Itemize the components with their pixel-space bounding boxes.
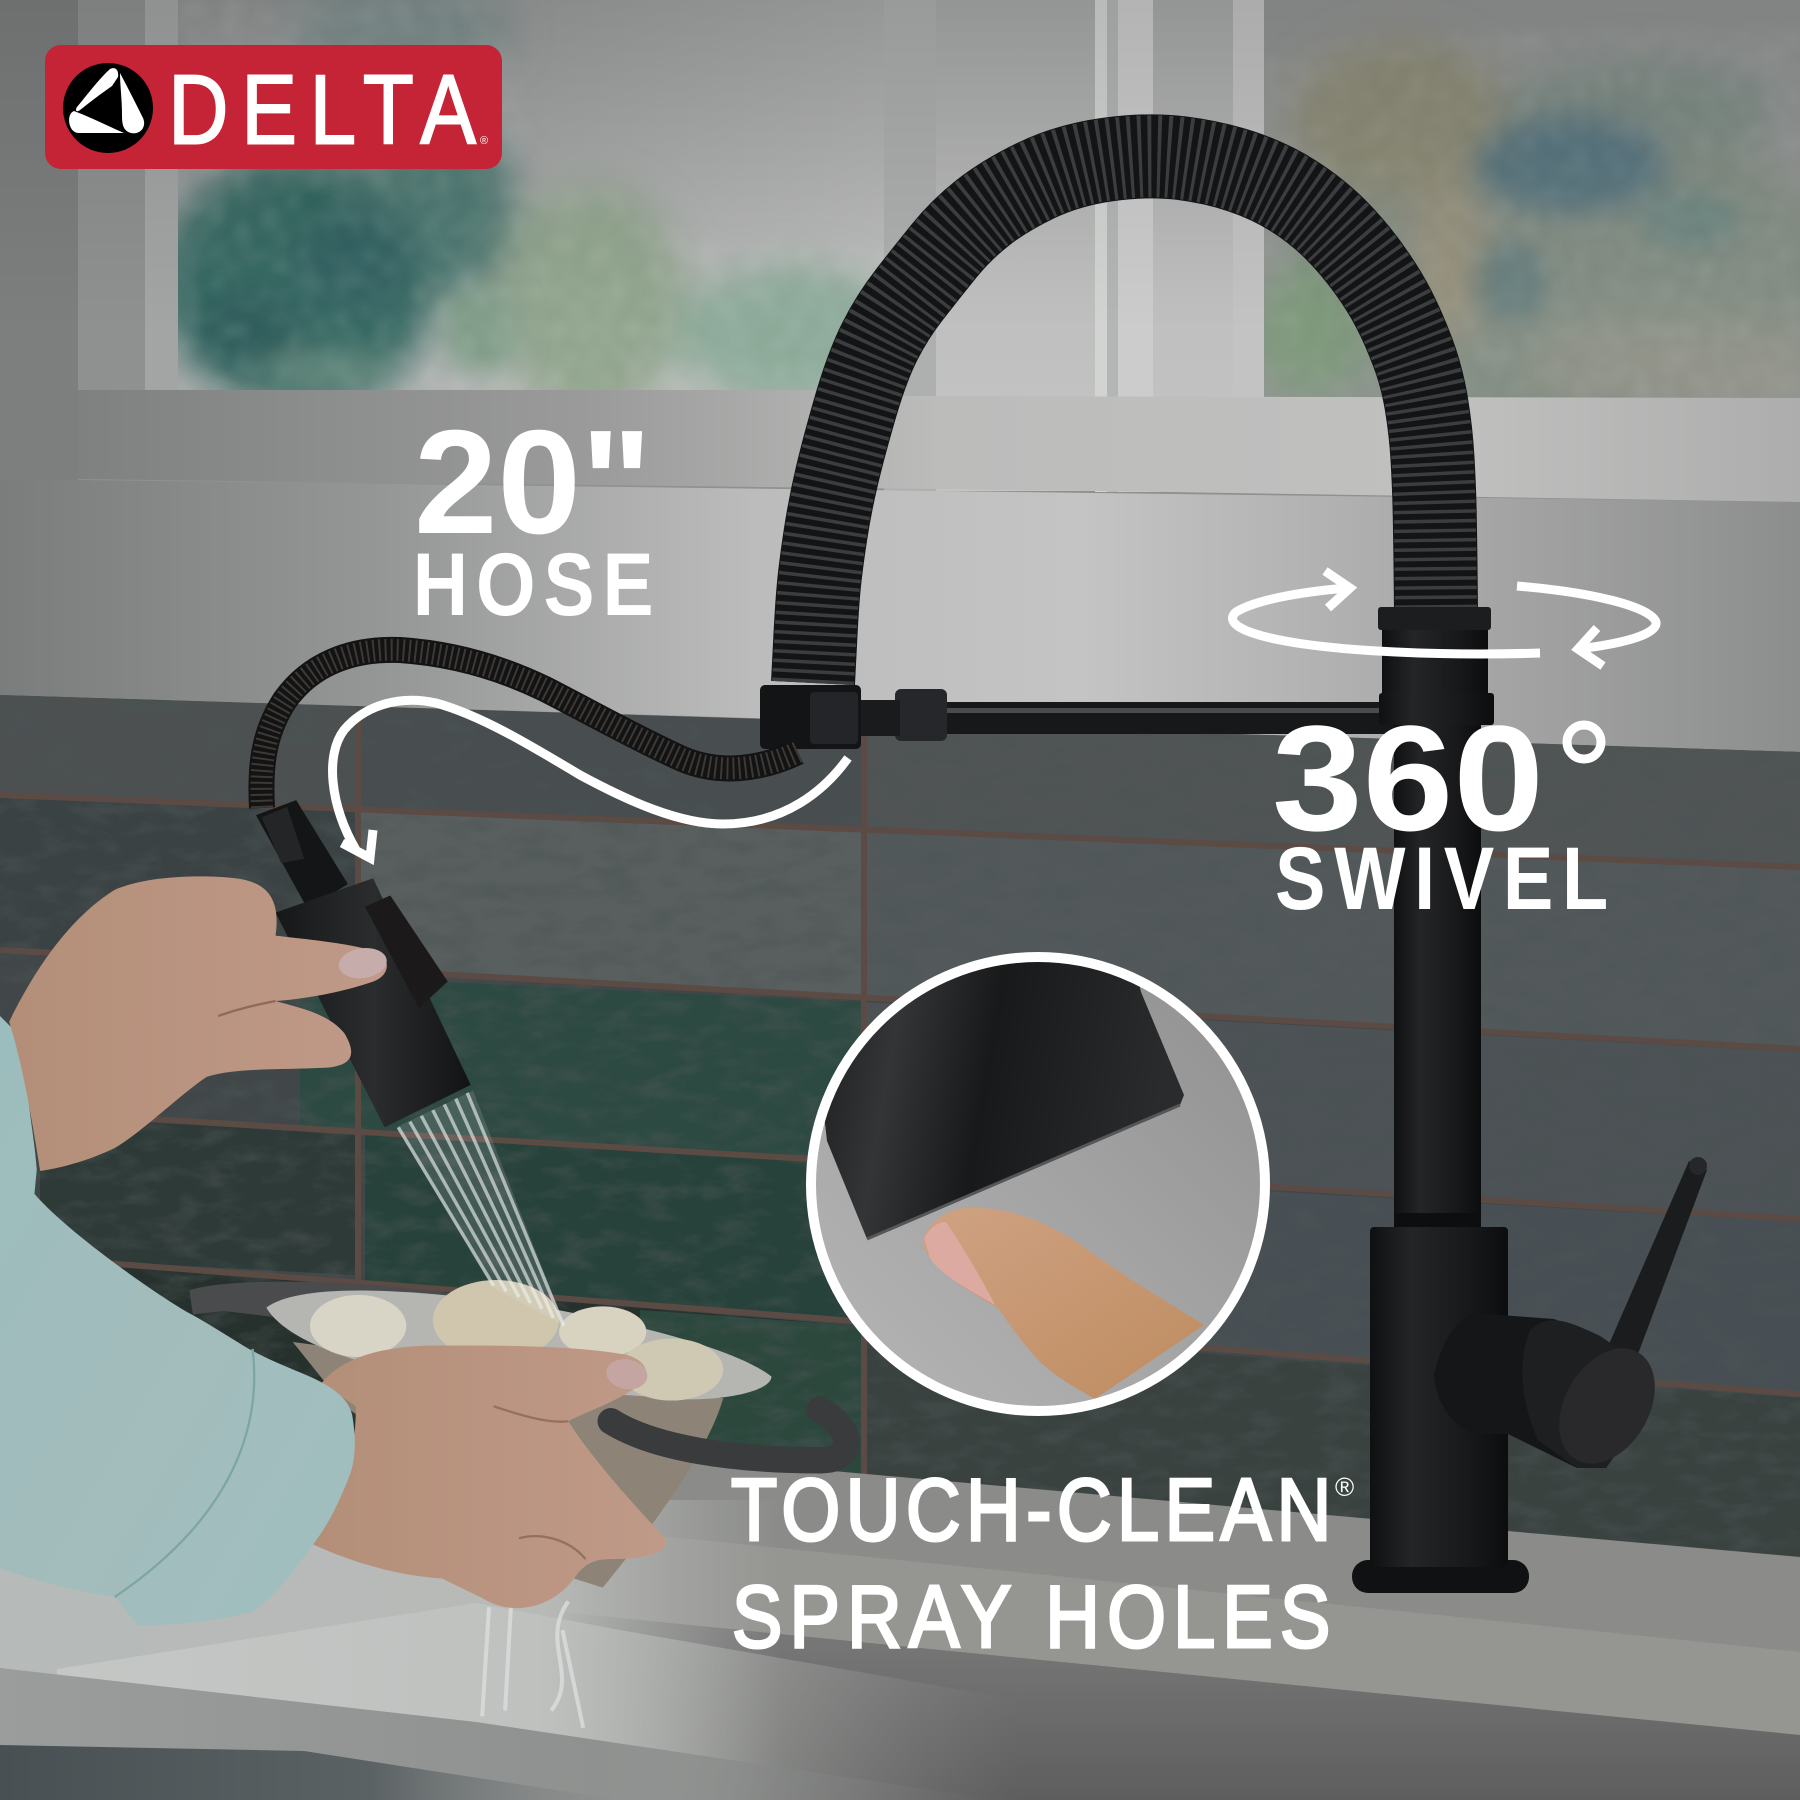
water spray: [396, 1091, 565, 1326]
colander with mushrooms: [189, 1280, 771, 1588]
horizontal arm: [855, 689, 1400, 741]
logo: Delta badge: [45, 45, 502, 169]
right window with trees: [1264, 34, 1800, 398]
icon: Delta triangle mark: [63, 63, 153, 153]
label: 20 inch hose: HOSE: [413, 535, 654, 634]
hose holder: [760, 685, 861, 749]
upper fingernail: [337, 945, 389, 981]
left window with trees: [178, 0, 884, 390]
spray trigger: [365, 895, 448, 1008]
label: touch-clean spray holes: ®: [1335, 1472, 1354, 1502]
label: touch-clean spray holes: SPRAY HOLES: [732, 1569, 1330, 1666]
sink basin: [57, 1603, 1020, 1800]
tile backsplash: [0, 695, 1800, 1570]
fingertip: [923, 1208, 1204, 1399]
lower wall band: [0, 479, 1800, 752]
wordmark: DELTA: [168, 56, 476, 165]
spray head body: [276, 878, 471, 1127]
spray head connector: [256, 800, 348, 909]
window sill: [78, 390, 1800, 502]
person washing mushrooms: [0, 800, 847, 1728]
arrow: 360 degree swivel: [1233, 571, 1656, 666]
arrow: hose length curve: [333, 700, 848, 858]
label: 360 degree swivel: SWIVEL: [1275, 828, 1608, 928]
logo: Delta badge: ®: [480, 135, 488, 147]
faucet: [760, 156, 1707, 1593]
label: touch-clean spray holes: [731, 1462, 1354, 1666]
label: 20 inch hose: [413, 400, 654, 634]
countertop and sink: [0, 1441, 1800, 1800]
upper hand: [9, 876, 387, 1171]
label: 360 degree swivel: 360: [1272, 694, 1544, 862]
fingernail: [924, 1222, 995, 1305]
spray head closeup: [824, 962, 1184, 1240]
shirt sleeve: [0, 1016, 355, 1626]
label: 20 inch hose: 20": [414, 400, 652, 565]
coiled spout: [813, 156, 1436, 683]
colander handle: [611, 1410, 847, 1460]
callout: touch-clean spray holes closeup: [800, 900, 1266, 1412]
sink front rim: [0, 1668, 1000, 1800]
background: kitchen wall and windows: [0, 0, 1800, 752]
mixer handle: [1434, 1157, 1707, 1481]
label: touch-clean spray holes: TOUCH-CLEAN: [731, 1462, 1331, 1559]
braided pull-down hose: [261, 650, 798, 808]
faucet column: [1352, 607, 1529, 1593]
lower fingernail: [604, 1356, 650, 1392]
lower hand: [312, 1345, 665, 1608]
falling water: [482, 1601, 583, 1728]
label: 360 degree swivel: [1272, 694, 1608, 928]
